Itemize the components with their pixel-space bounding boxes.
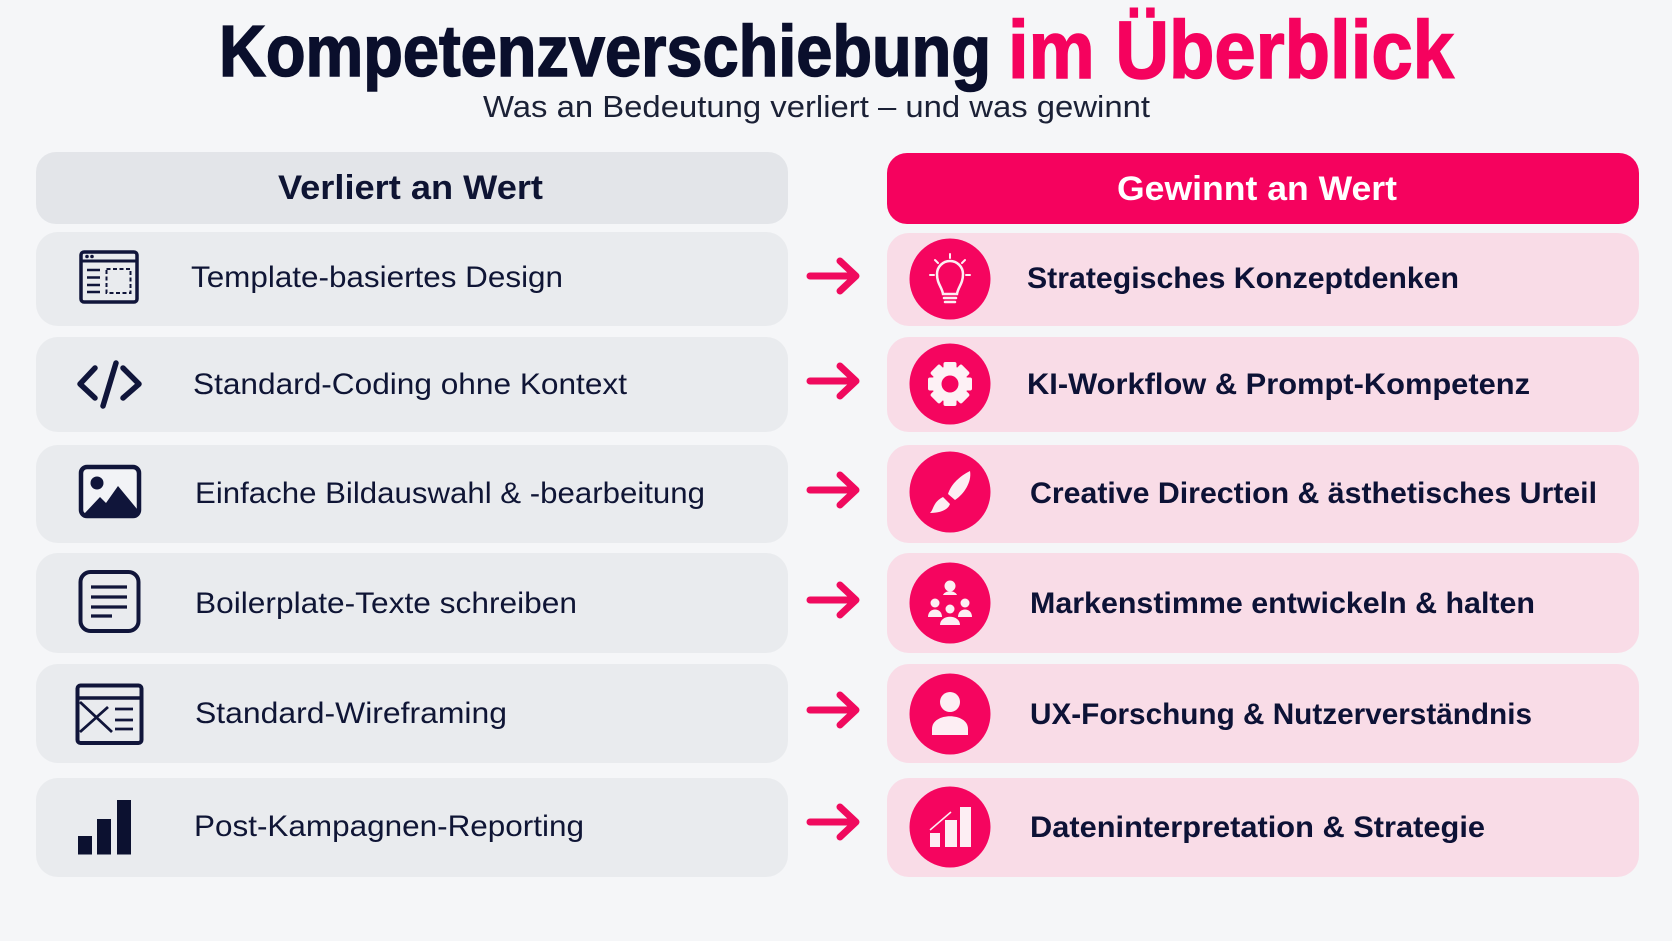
icon: gear bbox=[910, 344, 990, 424]
column header: Gewinnt an Wert: Gewinnt an Wert bbox=[1117, 170, 1397, 208]
title: Kompetenzverschiebung bbox=[219, 12, 991, 92]
icon: bar chart bbox=[78, 800, 131, 854]
panel: verliert an Wert bbox=[36, 152, 788, 877]
row: Template-basiertes Design: Template-basiertes Design bbox=[191, 261, 563, 294]
row: Strategisches Konzeptdenken: Strategisches Konzeptdenken bbox=[1027, 262, 1459, 295]
row: Dateninterpretation bbox=[887, 778, 1639, 877]
arrow 1 bbox=[810, 261, 856, 291]
row: Einfache Bildauswahl bbox=[36, 445, 788, 543]
icon: user bbox=[910, 674, 990, 754]
row: Strategisches Konzeptdenken bbox=[887, 233, 1639, 326]
row: Standard-Coding ohne Kontext bbox=[36, 337, 788, 432]
row: UX-Forschung bbox=[887, 664, 1639, 763]
row: Markenstimme: Markenstimme entwickeln & halten bbox=[1030, 587, 1535, 620]
arrow 6 bbox=[810, 807, 856, 837]
row: Standard-Coding ohne Kontext: Standard-Coding ohne Kontext bbox=[193, 368, 628, 401]
arrow 4 bbox=[810, 585, 856, 615]
row: Standard-Wireframing bbox=[36, 664, 788, 763]
icon: people group bbox=[910, 562, 990, 644]
row: Dateninterpretation: Dateninterpretation & Strategie bbox=[1030, 811, 1485, 844]
panel: gewinnt an Wert bbox=[887, 153, 1639, 877]
row: Creative Direction bbox=[887, 445, 1639, 543]
column header: Verliert an Wert bbox=[36, 152, 788, 224]
icon: document bbox=[80, 572, 138, 631]
row: Post-Kampagnen-Reporting bbox=[36, 778, 788, 877]
row: Boilerplate-Texte bbox=[36, 553, 788, 653]
row: Boilerplate-Texte: Boilerplate-Texte schreiben bbox=[195, 587, 577, 620]
arrow 5 bbox=[810, 695, 856, 725]
icon: light bulb bbox=[910, 238, 990, 320]
column header: Gewinnt an Wert bbox=[887, 153, 1639, 224]
title: im Überblick bbox=[1008, 5, 1454, 96]
row: KI-Workflow: KI-Workflow & Prompt-Kompetenz bbox=[1027, 368, 1530, 401]
arrow 2 bbox=[810, 366, 856, 396]
row: KI-Workflow bbox=[887, 337, 1639, 432]
icon: brush bbox=[910, 452, 990, 532]
row: Markenstimme bbox=[887, 553, 1639, 653]
icon: code brackets bbox=[80, 363, 139, 406]
row: Post-Kampagnen-Reporting: Post-Kampagnen-Reporting bbox=[194, 810, 584, 843]
arrow 3 bbox=[810, 475, 856, 505]
row: Creative Direction: Creative Direction & ästhetisches Urteil bbox=[1030, 477, 1597, 510]
icon: template window bbox=[81, 252, 137, 302]
icon: wireframe bbox=[78, 686, 142, 743]
icon: image bbox=[81, 467, 139, 516]
row: Einfache Bildauswahl: Einfache Bildauswahl & -bearbeitung bbox=[195, 477, 705, 510]
column header: Verliert an Wert: Verliert an Wert bbox=[278, 169, 543, 207]
icon: rising bars bbox=[910, 786, 990, 868]
subtitle: Was an Bedeutung verliert – und was gewinnt bbox=[483, 89, 1150, 124]
title bbox=[219, 5, 1454, 96]
row: Template-basiertes Design bbox=[36, 232, 788, 326]
row: Standard-Wireframing: Standard-Wireframing bbox=[195, 697, 507, 730]
row: UX-Forschung: UX-Forschung & Nutzerverständnis bbox=[1030, 698, 1532, 731]
